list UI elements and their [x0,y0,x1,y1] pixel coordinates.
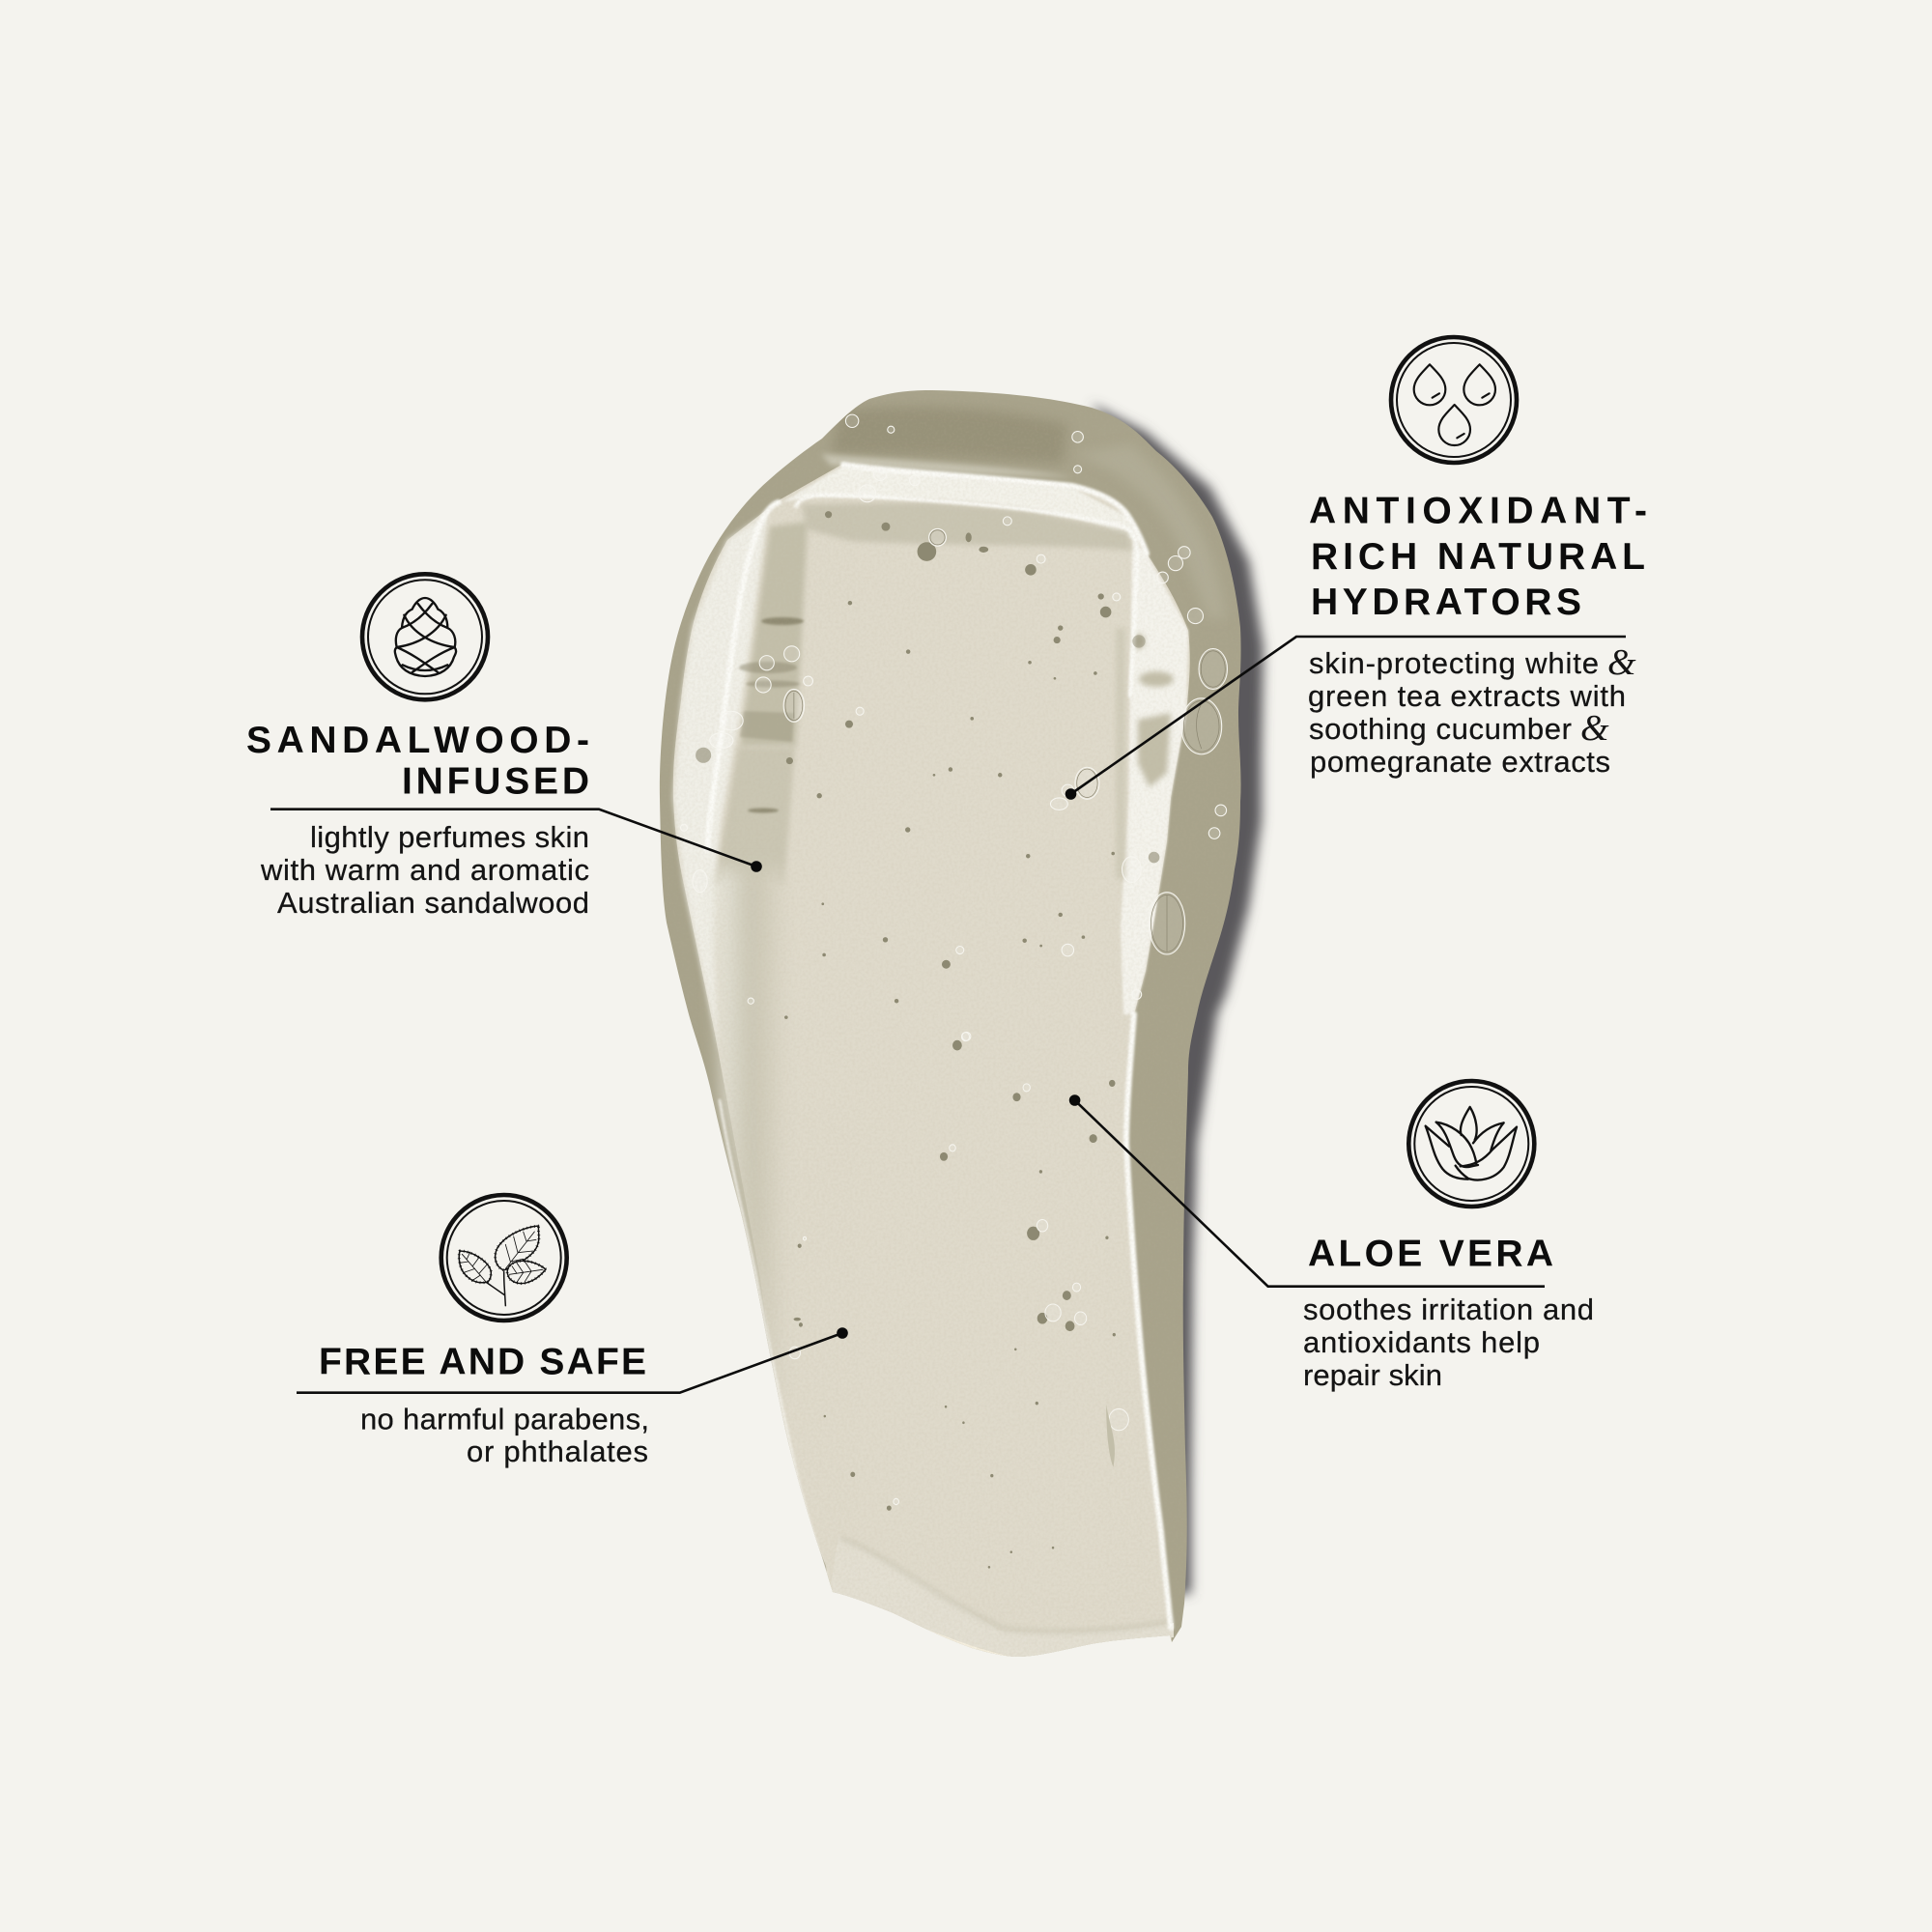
bright zone on left [673,512,768,1053]
callout: free and safe [297,1195,848,1468]
description: green tea extracts with [1308,679,1626,713]
description: antioxidants help [1303,1325,1540,1359]
description: lightly perfumes skin [310,820,589,854]
description [260,820,589,920]
lower left soft band [713,869,787,1401]
heading: INFUSED [402,761,589,803]
heading: ANTIOXIDANT- [1309,491,1647,532]
paper texture [674,466,1187,1649]
leader line with dot [270,810,762,872]
dark vertical band left [740,522,808,747]
tinted band beneath top [802,502,1132,551]
callout: antioxidant-rich natural hydrators [1065,337,1647,800]
heading [246,720,589,803]
heading: HYDRATORS [1311,582,1581,623]
leader line with dot [297,1327,848,1393]
bright zone on right [1121,541,1188,1014]
olive shading at top [831,407,1067,464]
specks and bubbles upper [680,414,1227,1040]
gel swatch [657,386,1264,1671]
description: repair skin [1303,1358,1442,1392]
icon: three water drops [1391,337,1517,463]
callout: aloe vera [1069,1081,1594,1392]
description: Australian sandalwood [277,886,589,920]
heading [1309,491,1647,623]
white highlights [707,465,1171,1628]
description: & [1580,708,1609,749]
froth edge at bottom [831,1586,1174,1657]
description [1308,642,1636,779]
leader line with dot [1065,637,1626,800]
icon: pine cone [362,574,488,699]
heading: SANDALWOOD- [246,720,589,761]
dark strips in band [739,617,804,813]
description: or phthalates [467,1435,648,1468]
description: soothing cucumber [1309,712,1572,746]
infographic canvas [247,334,1646,1657]
top pale band [782,466,1138,543]
leader line with dot [1069,1094,1545,1287]
heading: FREE AND SAFE [319,1342,646,1383]
cream bottom lip [927,1630,1171,1656]
description [1303,1293,1594,1392]
description [360,1403,649,1468]
callout: sandalwood-infused [246,574,762,920]
heading: RICH NATURAL [1311,536,1645,578]
icon: aloe plant [1408,1081,1534,1207]
description: with warm and aromatic [260,853,589,887]
gel outer olive body [660,390,1241,1657]
light clear gel zone [673,464,1190,1671]
right inner blotches [1116,628,1174,879]
description: pomegranate extracts [1310,745,1610,779]
description: soothes irritation and [1303,1293,1594,1326]
specks and bubbles lower [789,1033,1128,1569]
icon: leaves [441,1195,567,1321]
description: no harmful parabens, [360,1403,649,1435]
heading: ALOE VERA [1308,1234,1553,1275]
description: & [1607,642,1636,683]
drop shadow of gel [1092,404,1264,1594]
description: skin-protecting white [1309,646,1599,680]
